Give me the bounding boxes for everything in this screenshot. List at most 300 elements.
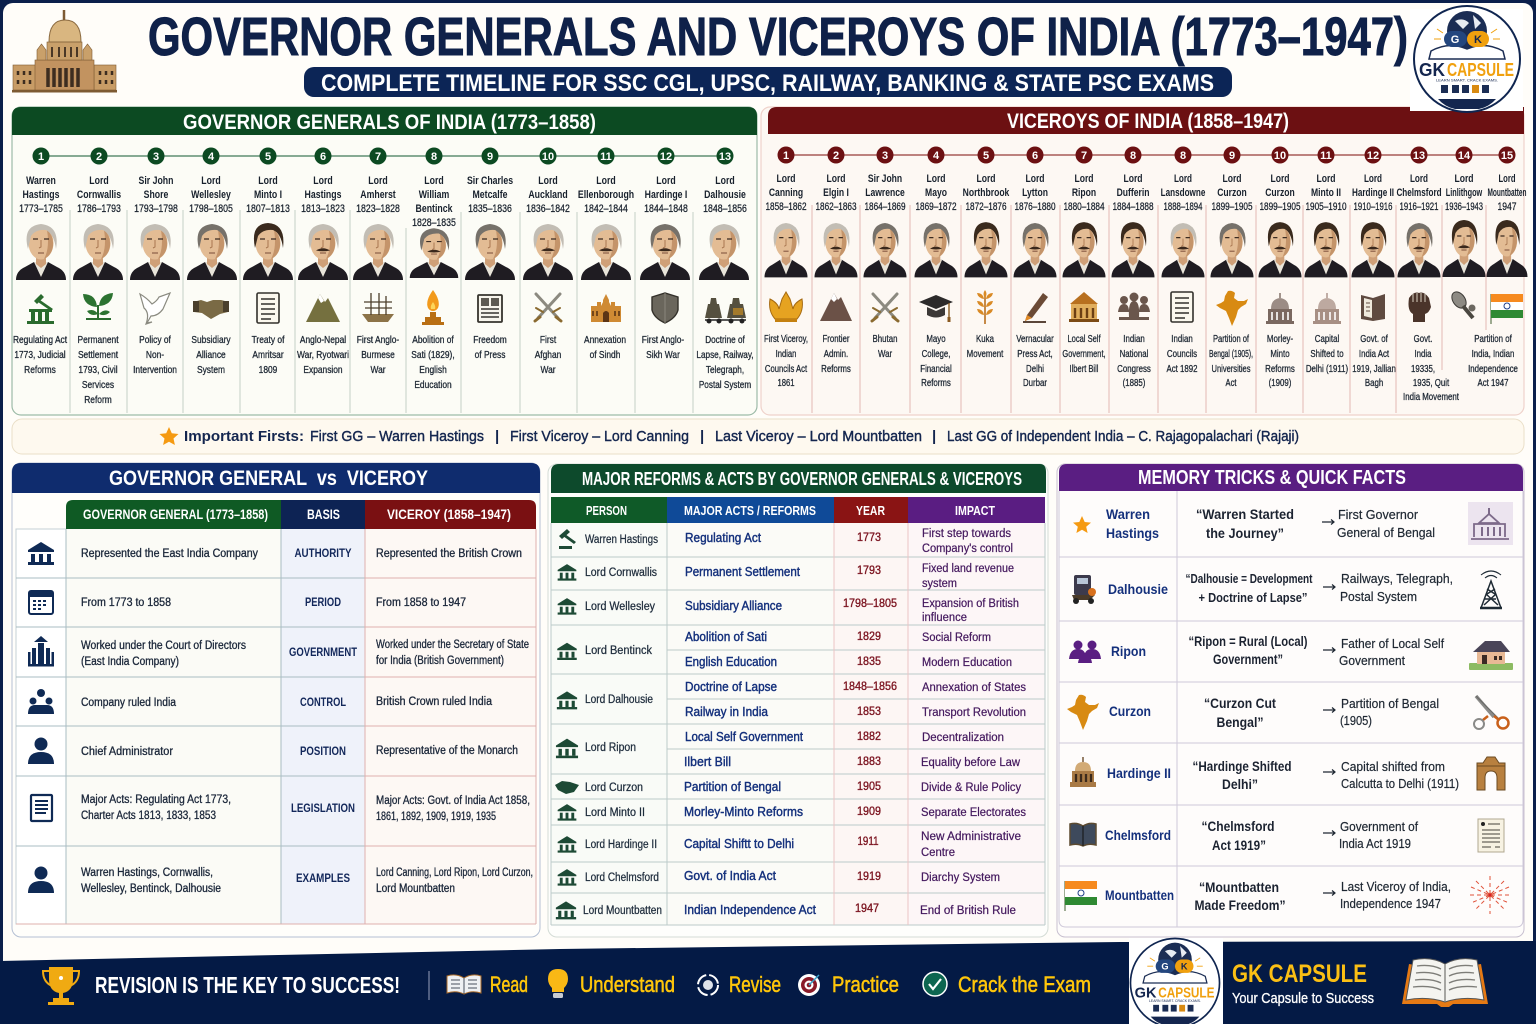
column: Lord Mountbatten: India, Indian (1472, 348, 1514, 359)
column: Lord Linlithgow: 14 (1458, 150, 1471, 162)
years: 1947 (855, 901, 879, 915)
viceroy column text: Representative of the Monarch (376, 745, 518, 757)
years: 1883 (857, 754, 881, 768)
heading: viceroys: VICEROYS OF INDIA (1858–1947) (1007, 110, 1289, 133)
impacts: Centre (921, 847, 955, 859)
major acts: Morley-Minto Reforms (684, 805, 803, 819)
reforms table: YEAR (856, 503, 885, 518)
impacts: Diarchy System (921, 872, 1000, 884)
column: Lord Auckland (523, 148, 573, 376)
column: Lord Elgin I: Frontier (822, 333, 850, 344)
column: Warren Hastings: Reforms (24, 364, 56, 376)
column: Lord Ripon: Local Self (1067, 333, 1101, 344)
major acts: Partition of Bengal (684, 780, 781, 794)
icon: legislation (31, 795, 52, 821)
column: Lord Curzon (9): Bengal (1905), (1209, 348, 1253, 359)
column: Lord Ripon: Ilbert Bill (1070, 363, 1098, 374)
governor general column text: From 1773 to 1858 (81, 597, 171, 609)
column: Lord Ellenborough: of Sindh (590, 349, 620, 361)
row: Ripon: Government (1339, 653, 1405, 668)
column: Lord Amherst: 1823–1828 (356, 203, 400, 215)
column: Warren Hastings: Warren (26, 175, 56, 187)
governor general column text: Company ruled India (81, 697, 177, 709)
row: Warren Hastings: “Warren Started (1196, 507, 1294, 522)
column: Lord Auckland: 1836–1842 (526, 203, 570, 215)
column: Lord Mayo: 4 (933, 150, 940, 162)
column: Lord Chelmsford: 1916–1921 (1400, 200, 1438, 212)
column: Lord Dalhousie: Dalhousie (704, 189, 746, 201)
column: Lord Minto I: Amritsar (252, 349, 284, 361)
column: Lord Northbrook: 1872–1876 (965, 201, 1007, 213)
years: 1853 (857, 704, 881, 718)
column: Lord Mayo: Reforms (921, 377, 951, 388)
column: Lord Amherst: First Anglo- (357, 334, 399, 346)
column: Lord Hardinge II (1352, 146, 1396, 388)
column: Lord Mayo: Mayo (926, 333, 946, 344)
person icons (555, 529, 579, 919)
column: Lord Auckland: Auckland (528, 189, 568, 201)
column: Lord Minto I: Treaty of (252, 334, 285, 346)
icon: period calendar (29, 591, 53, 614)
panel: viceroys timeline (761, 107, 1528, 415)
column: Lord Canning: 1861 (777, 377, 795, 388)
basis column text (289, 548, 357, 885)
years: 1905 (857, 779, 881, 793)
column: Lord Northbrook: Northbrook (963, 187, 1010, 199)
person names: Lord Dalhousie (585, 694, 653, 706)
column: Lord Dufferin: 8 (1130, 150, 1136, 162)
step: understand: Understand (580, 972, 675, 997)
column: Lord Curzon (9): Universities (1212, 363, 1251, 374)
column: Lord Mayo: Financial (920, 363, 952, 374)
comparison table: GOVERNOR GENERAL (1773–1858) (83, 507, 268, 522)
years: 1848–1856 (843, 679, 897, 693)
years: 1909 (857, 804, 881, 818)
column: Lord William Bentinck: Bentinck (416, 203, 453, 215)
heading: major reforms: MAJOR REFORMS & ACTS BY GOVERNOR GENERALS & VICEROYS (582, 468, 1022, 489)
column: Lord Mayo: Mayo (925, 187, 947, 199)
column: Lord Amherst (353, 148, 403, 376)
column: Sir John Shore: Policy of (139, 334, 171, 346)
row: Mountbatten: “Mountbatten (1199, 880, 1279, 895)
column: Lord Hardinge I: Lord (656, 175, 676, 187)
column: Lord Auckland: First (540, 334, 556, 346)
column: Lord Hastings: Hastings (305, 189, 342, 201)
column: Lord Hardinge I: Hardinge I (645, 189, 688, 201)
column: Lord Lytton: 6 (1032, 150, 1038, 162)
logo: GK Capsule footer (1129, 938, 1223, 1024)
column: Sir Charles Metcalfe: Freedom (473, 334, 507, 346)
column: Lord Dalhousie: 1848–1856 (703, 203, 747, 215)
column: Lord Dufferin: Congress (1117, 363, 1151, 374)
column: Lord Northbrook: 5 (983, 150, 989, 162)
viceroy column text: 1861, 1892, 1909, 1919, 1935 (376, 811, 496, 823)
row: Ripon: Father of Local Self (1341, 636, 1444, 651)
row: Ripon (1069, 634, 1513, 670)
column: Lord Amherst: Lord (368, 175, 388, 187)
column: Lord Chelmsford: 19335, (1411, 363, 1435, 374)
column: Lord Mountbatten: Independence (1468, 363, 1518, 374)
column: Lord Hardinge II: Bagh (1365, 377, 1383, 388)
column: Lord Dalhousie: Postal System (699, 378, 751, 390)
column: Lord Minto I: Lord (258, 175, 278, 187)
column: Lord Auckland: War (540, 364, 556, 376)
column: Sir John Lawrence: Bhutan (873, 333, 897, 344)
viceroy column text: From 1858 to 1947 (376, 597, 466, 609)
column: Lord Cornwallis: 1793, Civil (78, 364, 118, 376)
column: Lord Amherst: War (370, 364, 386, 376)
column: Lord Dalhousie: Lapse, Railway, (696, 348, 754, 360)
column: Lord Lansdowne: Lord (1174, 173, 1192, 185)
column: Warren Hastings: 1773–1785 (19, 203, 63, 215)
person names: Lord Cornwallis (585, 567, 657, 579)
column: Lord William Bentinck: Education (414, 379, 452, 391)
row: Dalhousie: Dalhousie (1108, 581, 1168, 597)
row: Dalhousie: Railways, Telegraph, (1341, 571, 1453, 586)
column: Lord Ripon (1062, 146, 1106, 374)
column: Lord Curzon (9): Act (1226, 377, 1237, 388)
column: Sir John Lawrence: War (878, 348, 892, 359)
column: Lord Elgin I: Lord (826, 173, 846, 185)
column: Lord Dufferin: Dufferin (1117, 187, 1149, 199)
person names: Lord Bentinck (585, 645, 652, 657)
panel: governor general vs viceroy (12, 463, 540, 937)
column: Lord Cornwallis: Lord (89, 175, 109, 187)
column: Lord Mountbatten: Partition of (1474, 333, 1512, 344)
major acts: Indian Independence Act (684, 903, 816, 917)
column: Lord Linlithgow: 1936–1943 (1445, 201, 1483, 213)
column: Sir John Lawrence: 1864–1869 (864, 201, 906, 213)
step: revise (698, 972, 781, 997)
column: Lord Curzon (9) (1209, 146, 1254, 388)
column: Lord Chelmsford (1396, 146, 1459, 402)
row: Hardinge II (1070, 757, 1505, 792)
viceroy column text: Major Acts: Govt. of India Act 1858, (376, 795, 530, 807)
column: Lord Curzon (9): Lord (1222, 173, 1242, 185)
column: Sir John Shore: 3 (153, 151, 159, 163)
column: Lord Minto I: 1809 (259, 364, 277, 376)
impacts: Separate Electorates (921, 807, 1026, 819)
column: Lord Dufferin: 1884–1888 (1112, 201, 1154, 213)
person names: Lord Curzon (585, 782, 643, 794)
column: Lord Cornwallis: Reform (84, 394, 112, 406)
row: Mountbatten: Last Viceroy of India, (1341, 879, 1451, 894)
column: Warren Hastings: Hastings (23, 189, 60, 201)
column: Lord Canning (764, 146, 808, 388)
column: Lord Dufferin: National (1120, 348, 1148, 359)
viceroy column text: British Crown ruled India (376, 696, 493, 708)
governor general column text: Warren Hastings, Cornwallis, (81, 867, 213, 879)
column: Lord Amherst: 7 (375, 151, 381, 163)
column: Sir John Shore: Non- (146, 349, 164, 361)
column: Lord Minto I (243, 148, 293, 376)
column: Lord Canning: 1858–1862 (765, 201, 807, 213)
impacts: system (922, 578, 957, 590)
column: Sir Charles Metcalfe: of Press (475, 349, 506, 361)
firsts text: Last GG of Independent India – C. Rajagopalachari (Rajaji) (947, 428, 1299, 445)
row: Curzon: (1905) (1340, 713, 1372, 728)
column: Lord Hardinge I: 1844–1848 (644, 203, 688, 215)
person names: Lord Ripon (585, 742, 636, 754)
column: Lord Auckland: Lord (538, 175, 558, 187)
column: Lord Lytton: Lytton (1022, 187, 1048, 199)
column: Sir John Shore: Shore (144, 189, 169, 201)
column: Lord Minto II: Minto II (1311, 187, 1341, 199)
step: practice: Practice (832, 972, 899, 997)
panel: memory tricks (1057, 464, 1524, 937)
column: Lord Lytton: Press Act, (1017, 348, 1053, 359)
row: Curzon: Bengal” (1216, 715, 1264, 730)
column: Lord Curzon (10): Curzon (1265, 187, 1295, 199)
column: Lord Wellesley: Alliance (196, 349, 226, 361)
column: Lord Dalhousie: Lord (715, 175, 735, 187)
column: Lord Lansdowne: 1888–1894 (1164, 200, 1202, 212)
major acts: Capital Shiftt to Delhi (684, 837, 794, 851)
basis column text: EXAMPLES (296, 873, 350, 885)
column: Lord Curzon (10): Morley- (1267, 333, 1293, 344)
column: Lord Chelmsford: India Movement (1403, 391, 1459, 402)
years: 1773 (857, 530, 881, 544)
step: understand (548, 969, 675, 998)
column: Lord Minto II: Shifted to (1310, 348, 1344, 359)
column: Lord Hastings: Anglo-Nepal (300, 334, 346, 346)
impacts: Modern Education (922, 657, 1012, 669)
column: Lord Lytton: Durbar (1023, 377, 1047, 388)
column: Lord Hardinge II: 12 (1367, 150, 1379, 162)
viceroy column text: Lord Canning, Lord Ripon, Lord Curzon, (376, 867, 533, 879)
person names (583, 534, 662, 917)
major acts: Regulating Act (685, 531, 761, 545)
column: Lord Lytton: 1876–1880 (1014, 201, 1056, 213)
step: revise: Revise (729, 972, 781, 997)
column: Lord Cornwallis: Services (82, 379, 114, 391)
column: Lord William Bentinck: Lord (424, 175, 444, 187)
row: Hardinge II: Capital shifted from (1341, 759, 1445, 774)
impacts: Annexation of States (922, 682, 1026, 694)
row: Hardinge II: Calcutta to Delhi (1911) (1341, 776, 1459, 791)
column: Lord Dalhousie: Doctrine of (705, 333, 745, 345)
major acts: Permanent Settlement (685, 565, 800, 579)
column: Lord Hardinge I: First Anglo- (642, 334, 684, 346)
row: Dalhousie: Postal System (1340, 589, 1417, 604)
column: Lord Northbrook: Kuka (976, 333, 995, 344)
row: Chelmsford (1070, 819, 1504, 853)
column: Sir John Shore: 1793–1798 (134, 203, 178, 215)
column: Lord Hardinge I (640, 148, 690, 361)
column: Lord Hardinge II: 1910–1916 (1354, 200, 1392, 212)
column: Lord Chelmsford: Govt. (1414, 333, 1432, 344)
column: Lord Hardinge II: Govt. of (1360, 333, 1388, 344)
row: Chelmsford: “Chelmsford (1202, 819, 1274, 834)
row: Warren Hastings: Hastings (1106, 525, 1159, 541)
row: Chelmsford: Act 1919” (1212, 838, 1266, 853)
column: Lord Chelmsford: 13 (1413, 150, 1425, 162)
icon: control (28, 689, 54, 714)
major acts: Subsidiary Alliance (685, 599, 782, 613)
governor general column text: Represented the East India Company (81, 548, 258, 560)
column: Warren Hastings: 1 (38, 151, 44, 163)
column: Lord Curzon (10) (1258, 146, 1302, 388)
column: Lord Cornwallis: 2 (96, 151, 102, 163)
years: 1793 (857, 563, 881, 577)
step: read (447, 972, 528, 997)
column: Lord William Bentinck (410, 148, 458, 391)
column: Lord Dalhousie (696, 148, 754, 390)
column: Lord Curzon (10): 10 (1274, 150, 1286, 162)
row: Hardinge II: Delhi” (1222, 777, 1258, 792)
column: Lord Hastings (297, 148, 349, 376)
basis column text: GOVERNMENT (289, 647, 357, 659)
column: Lord Curzon (10): Minto (1270, 348, 1290, 359)
footer slogan: REVISION IS THE KEY TO SUCCESS! (95, 972, 400, 998)
column: Lord Ripon: 1880–1884 (1063, 201, 1105, 213)
row: Warren Hastings: the Journey” (1206, 526, 1284, 541)
column: Lord Dufferin: (1885) (1123, 377, 1145, 388)
column: Lord Minto II (1304, 146, 1348, 374)
column: Lord Ripon: 7 (1081, 150, 1087, 162)
person names: Lord Mountbatten (583, 905, 662, 917)
column: Lord William Bentinck: 8 (431, 151, 437, 163)
governor general column text: Worked under the Court of Directors (81, 640, 246, 652)
row: Curzon (1067, 695, 1508, 730)
column: Sir Charles Metcalfe: Metcalfe (473, 189, 508, 201)
icon: position (28, 738, 54, 764)
column: Lord Amherst: Burmese (361, 349, 395, 361)
column: Lord William Bentinck: English (419, 364, 447, 376)
column: Sir Charles Metcalfe: Sir Charles (467, 175, 514, 187)
row: Curzon: Curzon (1109, 703, 1151, 719)
impacts: Company's control (922, 543, 1013, 555)
column: Lord Elgin I: Reforms (821, 363, 851, 374)
column: Lord Mountbatten: Act 1947 (1477, 377, 1509, 388)
column: Warren Hastings: 1773, Judicial (14, 349, 66, 361)
heading: governor generals: GOVERNOR GENERALS OF INDIA (1773–1858) (183, 111, 596, 134)
icon: government (28, 636, 54, 666)
column: Lord Hardinge I: 12 (660, 151, 672, 163)
row: Chelmsford: Government of (1340, 819, 1418, 834)
column: Lord Minto II: 1905–1910 (1305, 201, 1347, 213)
column: Sir Charles Metcalfe (465, 148, 515, 361)
column: Lord Minto II: Capital (1315, 333, 1339, 344)
column: Lord Wellesley: 1798–1805 (189, 203, 233, 215)
firsts text: | (932, 428, 936, 445)
row: Warren Hastings: Warren (1106, 506, 1150, 522)
firsts text: First GG – Warren Hastings (310, 428, 484, 445)
icon: open book (1402, 959, 1488, 1007)
row: Mountbatten: Made Freedom” (1194, 898, 1286, 913)
column: Lord Lytton: Delhi (1026, 363, 1044, 374)
years: 1911 (858, 834, 879, 848)
column: Lord Hardinge II: Hardinge II (1352, 187, 1394, 199)
reforms table: IMPACT (955, 503, 995, 518)
step: practice (798, 972, 899, 997)
years: 1829 (857, 629, 881, 643)
firsts text: | (495, 428, 499, 445)
row: Ripon: Government” (1213, 652, 1283, 667)
governor general column text: (East India Company) (81, 656, 179, 668)
logo: GK Capsule top (1410, 6, 1523, 112)
impacts: Expansion of British (922, 598, 1019, 610)
column: Lord Minto I: 1807–1813 (246, 203, 290, 215)
icon: capitol building (12, 10, 117, 92)
column: Lord Wellesley: Wellesley (191, 189, 231, 201)
column: Lord William Bentinck: William (419, 189, 449, 201)
impacts: Fixed land revenue (922, 563, 1014, 575)
column: Sir John Shore: Sir John (139, 175, 173, 187)
column: Lord Lansdowne: Councils (1167, 348, 1197, 359)
column: Lord Canning: 1 (783, 150, 789, 162)
column: Lord Curzon (10): 1899–1905 (1259, 201, 1301, 213)
basis column text: CONTROL (300, 697, 346, 709)
column: Lord Minto I: 5 (265, 151, 271, 163)
firsts text: Last Viceroy – Lord Mountbatten (715, 428, 922, 445)
column: Lord Canning: Councils Act (765, 363, 807, 374)
impacts: Equality before Law (921, 757, 1021, 769)
viceroy column text (376, 548, 533, 895)
years: 1919 (857, 869, 881, 883)
basis column text: LEGISLATION (291, 803, 355, 815)
column: Warren Hastings (13, 148, 67, 376)
column: Lord Linlithgow: Linlithgow (1446, 187, 1483, 199)
comparison table (16, 500, 536, 924)
comparison table: VICEROY (1858–1947) (387, 507, 511, 522)
subtitle pill: COMPLETE TIMELINE FOR SSC CGL, UPSC, RAILWAY, BANKING & STATE PSC EXAMS (321, 70, 1214, 97)
impacts: Divide & Rule Policy (921, 782, 1021, 794)
impacts: Decentralization (922, 732, 1004, 744)
column: Lord Amherst: Amherst (360, 189, 396, 201)
column: Lord Wellesley: System (197, 364, 225, 376)
firsts text (184, 428, 1299, 445)
column: Lord Lansdowne: Lansdowne (1161, 187, 1206, 199)
column: Lord Hastings: Lord (313, 175, 333, 187)
row: Warren Hastings (1073, 502, 1513, 545)
heading: memory tricks: MEMORY TRICKS & QUICK FACTS (1138, 467, 1406, 489)
column: Sir Charles Metcalfe: 9 (487, 151, 493, 163)
person names: Lord Minto II (585, 807, 645, 819)
column: Lord Hardinge II: 1919, Jallian (1352, 363, 1396, 374)
column: Lord Chelmsford: Chelmsford (1396, 187, 1442, 199)
column: Lord Elgin I: Elgin I (823, 187, 849, 199)
column: Lord Cornwallis: 1786–1793 (77, 203, 121, 215)
column: Lord Elgin I: Admin. (824, 348, 848, 359)
governor general column text: Chief Administrator (81, 746, 173, 758)
column: Lord Curzon (9): Partition of (1213, 333, 1249, 344)
footer band (0, 938, 1536, 1024)
column: Lord Dufferin (1112, 146, 1154, 388)
step: crack the exam (923, 972, 1091, 997)
column: Lord Ellenborough (578, 148, 634, 361)
row: Hardinge II: Hardinge II (1107, 765, 1171, 781)
firsts text: Important Firsts: (184, 428, 304, 445)
major acts (684, 531, 816, 917)
icon: examples (28, 866, 54, 893)
column: Lord Ellenborough: Lord (596, 175, 616, 187)
column: Lord Curzon (10): (1909) (1269, 377, 1291, 388)
column: Lord Northbrook: Movement (967, 348, 1004, 359)
person names: Warren Hastings (585, 534, 658, 546)
column: Lord Chelmsford: 1935, Quit (1413, 377, 1449, 388)
column: Lord Elgin I: 1862–1863 (815, 201, 857, 213)
column: Warren Hastings: Regulating Act (13, 334, 67, 346)
column: Lord Hastings: 1813–1823 (301, 203, 345, 215)
column: Lord Curzon (9): Curzon (1217, 187, 1247, 199)
column: Lord Cornwallis: Cornwallis (77, 189, 122, 201)
viceroy column text: Lord Mountbatten (376, 883, 455, 895)
row: Ripon: “Ripon = Rural (Local) (1188, 634, 1308, 649)
column: Lord Lytton: Vernacular (1016, 333, 1054, 344)
column: Lord Auckland: 10 (542, 151, 554, 163)
column: Lord Chelmsford: India (1414, 348, 1432, 359)
